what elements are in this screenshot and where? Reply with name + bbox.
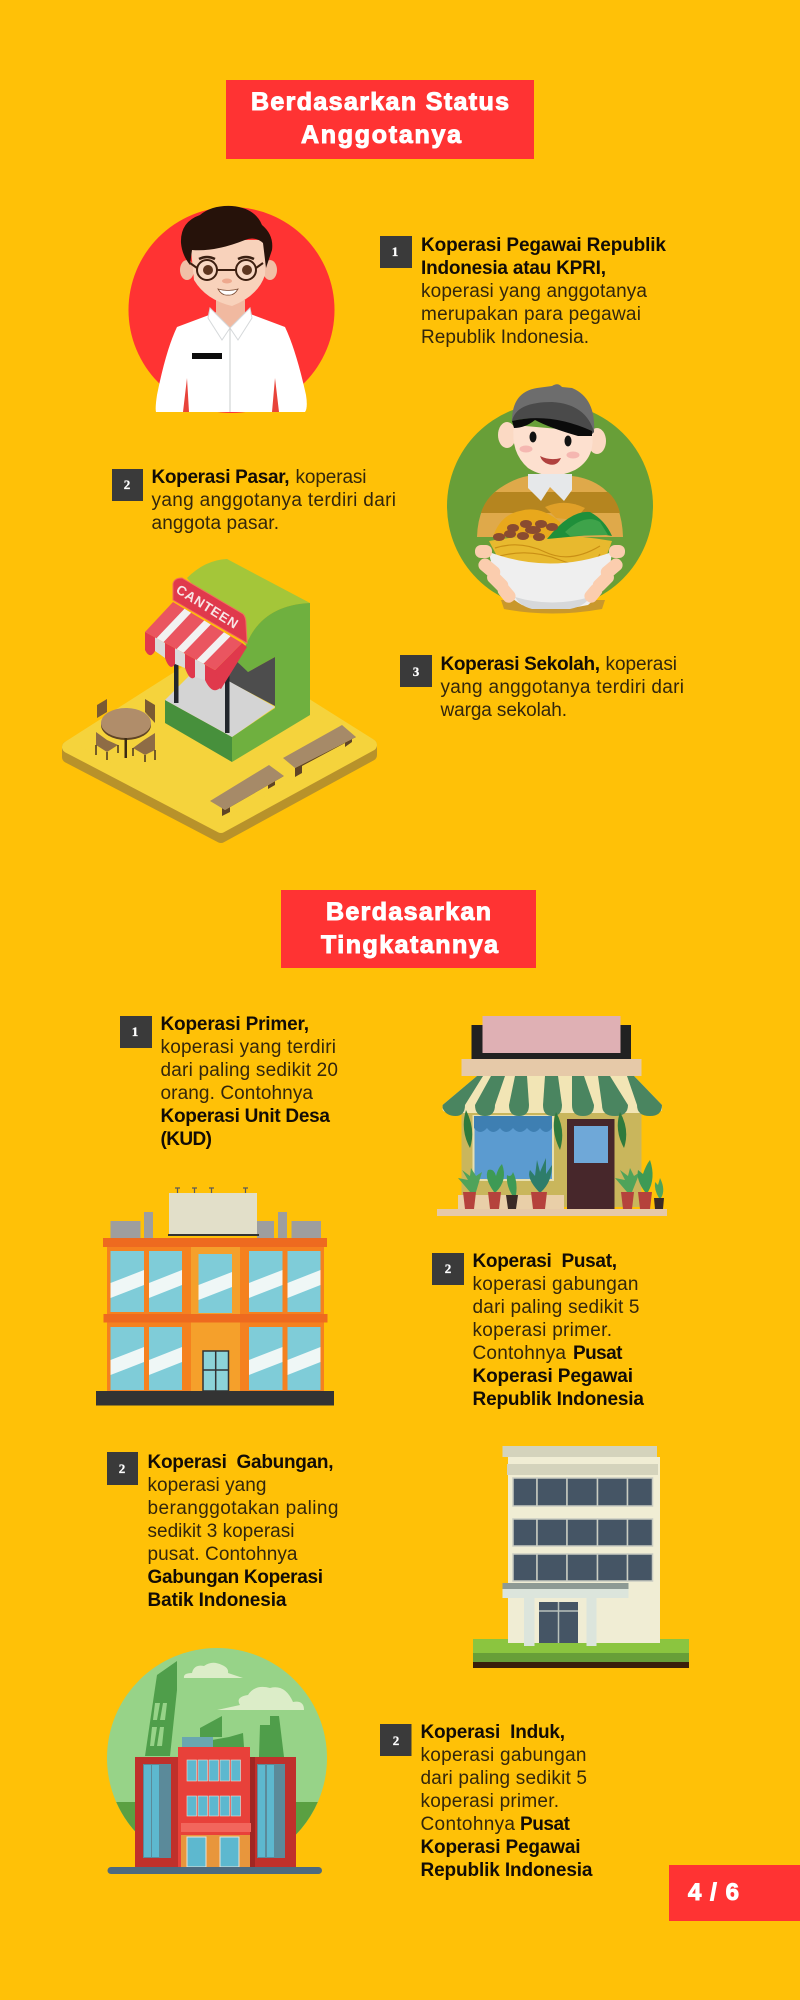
number badge 1 [120, 1016, 152, 1048]
text block: Koperasi Primer: Koperasi Primer, [160, 1014, 309, 1035]
text block: Koperasi Gabungan [107, 1452, 338, 1611]
heading: Berdasarkan Tingkatannya [281, 890, 536, 968]
text block: Koperasi Induk: koperasi primer. [420, 1791, 559, 1812]
number badge 2 [380, 1724, 412, 1756]
text block: Koperasi Pusat: koperasi gabungan [472, 1274, 638, 1295]
text block: Koperasi Pegawai Republik Indonesia: Koperasi Pegawai Republik [421, 235, 666, 256]
table with chairs [96, 699, 155, 762]
illustration: isometric canteen [68, 559, 371, 837]
text block: Koperasi Sekolah: warga sekolah. [440, 700, 567, 721]
text block: Koperasi Gabungan: beranggotakan paling [148, 1498, 338, 1519]
illustration: noodle seller holding a bowl [447, 384, 653, 614]
window rows [513, 1478, 652, 1581]
clouds [184, 1663, 304, 1710]
wing windows [143, 1764, 285, 1858]
page number badge: 4/6 [688, 1879, 739, 1906]
text block: Koperasi Primer: dari paling sedikit 20 [160, 1060, 338, 1081]
text block: Koperasi Induk: Republik Indonesia [420, 1860, 593, 1881]
text block: Koperasi Sekolah [400, 654, 684, 721]
text block: Koperasi Pusat [432, 1251, 644, 1410]
text block: Koperasi Gabungan: Gabungan Koperasi [148, 1567, 323, 1588]
text block: Koperasi Pegawai Republik Indonesia: Republik Indonesia. [421, 327, 589, 348]
potted plants [458, 1158, 664, 1209]
illustration: orange office building with billboard [96, 1188, 334, 1406]
text block: Koperasi Pusat: Contohnya [472, 1343, 566, 1364]
number badge 2 [112, 469, 143, 501]
text block: Koperasi Pusat: koperasi primer. [472, 1320, 612, 1341]
heading: Berdasarkan Status Anggotanya: Berdasarkan Status [251, 88, 509, 116]
text block: Koperasi Pegawai Republik Indonesia: koperasi yang anggotanya [421, 281, 647, 302]
text block: Koperasi Pusat: Koperasi Pegawai [472, 1366, 633, 1387]
text block: Koperasi Pusat: Republik Indonesia [472, 1389, 644, 1410]
number badge 2 [432, 1253, 464, 1285]
number badge 2: 2 [124, 477, 130, 492]
text block: Koperasi Induk: koperasi gabungan [420, 1745, 586, 1766]
number badge 2: 2 [393, 1733, 399, 1748]
text block: Koperasi Primer: Koperasi Unit Desa [160, 1106, 330, 1127]
centre windows [187, 1760, 240, 1816]
text block: Koperasi Pasar [112, 467, 396, 534]
number badge 3 [400, 655, 432, 687]
text block: Koperasi Sekolah: koperasi [606, 654, 677, 675]
text block: Koperasi Pegawai Republik Indonesia: merupakan para pegawai [421, 304, 641, 325]
text block: Koperasi Primer: orang. Contohnya [160, 1083, 313, 1104]
heading: Berdasarkan Status Anggotanya: Anggotanya [301, 121, 462, 149]
text block: Koperasi Primer: koperasi yang terdiri [160, 1037, 336, 1058]
text block: Koperasi Induk: Contohnya [420, 1814, 515, 1835]
text block: Koperasi Primer [120, 1014, 338, 1150]
text block: Koperasi Induk: dari paling sedikit 5 [420, 1768, 587, 1789]
text block: Koperasi Induk [380, 1722, 593, 1881]
awning stripes [443, 1076, 662, 1150]
number badge 1: 1 [392, 244, 398, 259]
text block: Koperasi Pasar: koperasi [296, 467, 366, 488]
text block: Koperasi Pegawai Republik Indonesia: Indonesia atau KPRI, [421, 258, 606, 279]
text block: Koperasi Pusat: dari paling sedikit 5 [472, 1297, 640, 1318]
heading: Berdasarkan Status Anggotanya [226, 80, 534, 159]
text block: Koperasi Pasar: Koperasi Pasar, [152, 467, 290, 488]
text block: Koperasi Pusat: Koperasi Pusat, [472, 1251, 617, 1272]
number badge 2: 2 [119, 1461, 125, 1476]
number badge 2 [107, 1452, 138, 1485]
number badge 2: 2 [445, 1261, 451, 1276]
text block: Koperasi Sekolah: yang anggotanya terdiri dari [440, 677, 684, 698]
text block: Koperasi Pusat: Pusat [573, 1343, 623, 1364]
number badge 3: 3 [413, 664, 420, 679]
text block: Koperasi Sekolah: Koperasi Sekolah, [440, 654, 600, 675]
number badge 1 [380, 236, 412, 268]
background towers [145, 1661, 284, 1757]
canteen awning and sign [145, 578, 247, 690]
heading: Berdasarkan Tingkatannya: Berdasarkan [326, 898, 491, 926]
illustration: small shop with striped awning [437, 1016, 667, 1216]
text block: Koperasi Induk: Pusat [520, 1814, 571, 1835]
canteen awning and sign: CANTEEN [173, 582, 241, 632]
text block: Koperasi Primer: (KUD) [160, 1129, 212, 1150]
illustration: civil servant man with glasses [128, 206, 334, 413]
text block: Koperasi Gabungan: koperasi yang [148, 1475, 266, 1496]
text block: Koperasi Pasar: yang anggotanya terdiri dari [152, 490, 396, 511]
glass windows [110, 1251, 320, 1390]
text block: Koperasi Gabungan: Batik Indonesia [148, 1590, 287, 1611]
text block: Koperasi Pasar: anggota pasar. [152, 513, 279, 534]
heading: Berdasarkan Tingkatannya: Tingkatannya [321, 931, 499, 959]
text block: Koperasi Gabungan: sedikit 3 koperasi [148, 1521, 294, 1542]
benches [210, 725, 356, 816]
illustration: red office building in green circle [107, 1648, 327, 1874]
text block: Koperasi Pegawai Republik Indonesia [380, 235, 666, 348]
text block: Koperasi Gabungan: pusat. Contohnya [148, 1544, 298, 1565]
page number badge [669, 1865, 800, 1921]
text block: Koperasi Induk: Koperasi Induk, [420, 1722, 565, 1743]
number badge 1: 1 [132, 1024, 138, 1039]
illustration: beige multi-storey building [473, 1446, 689, 1668]
text block: Koperasi Induk: Koperasi Pegawai [420, 1837, 580, 1858]
text block: Koperasi Gabungan: Koperasi Gabungan, [148, 1452, 334, 1473]
